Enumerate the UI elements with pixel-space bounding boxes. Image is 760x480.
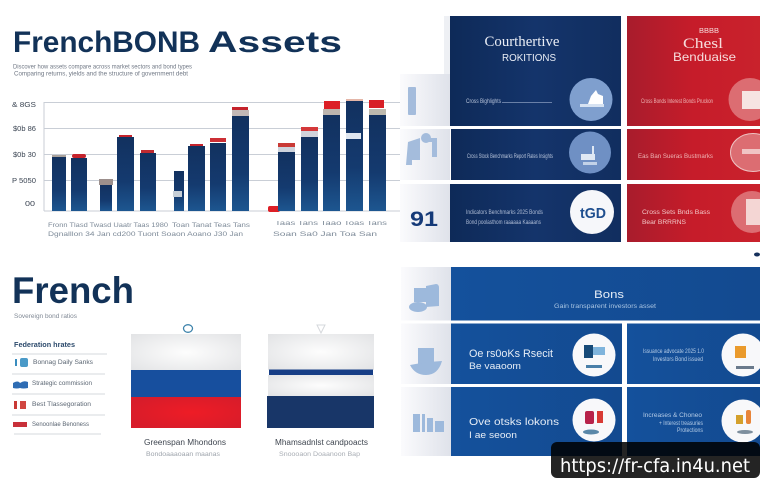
legend item 3: Best Tlassegoration [32,402,91,408]
subtitle text: Comparing returns, yields and the structure of government debt [14,72,188,78]
panel: navy row 3: Bond poolasthom raaaaaa Kaaaans [466,220,541,226]
icon: boat [410,348,442,375]
panel: red row 3: Bear BRRRNS [642,220,686,226]
legend item 2: Strategic commission [32,381,92,387]
y axis labels [12,102,36,208]
panel: flag 1: Bondoaaaoaan maanas [146,452,220,458]
x axis labels: Dgnalllon 34 Jan cd200 Tuont Soaon Aoano J30 Jan [48,232,243,238]
subtitle text: Discover how assets compare across market sectors and bond types [13,64,192,70]
icon: white circle 160 [570,190,614,234]
bars [52,99,386,212]
y axis labels: $0b 30 [13,152,36,159]
panel: navy comparative positions [450,16,621,126]
panel: blue row 3 left: I ae seoon [469,430,517,440]
marker dot [754,252,760,256]
panel: red chest benefits: Chesl [683,36,723,52]
x axis labels: Fronn Tlasd Twasd Uaatr Taas 1980 [48,223,169,229]
panel: navy row 3 [450,184,621,242]
title: French Bond Assets: Assets [208,26,342,59]
watermark url: https://fr-cfa.in4u.net [560,455,750,477]
icon: pink circle document [731,191,760,233]
panel: red chest benefits: Benduaise [673,50,736,64]
icon: white circle with orange block [722,334,760,376]
panel: bonds header: Bons [594,289,625,301]
icon: document bar [408,87,416,115]
panel: bottom right icon strip [401,267,451,456]
subtitle text [13,64,192,78]
y axis labels: P 5050 [12,178,36,185]
icon: number 91: 91 [410,208,438,231]
panel: red chest benefits [627,16,760,126]
heading: ROKITIONS [502,53,556,64]
bar chart [12,99,400,238]
icon: tap [406,133,437,165]
icon: pink oval [730,134,760,172]
heading: French: French [12,270,134,311]
icon: diamond [317,325,325,333]
watermark url [551,442,760,478]
panel: flag 2 [267,325,374,458]
panel: flag 1 [131,325,241,458]
icon: ring [184,325,192,332]
title: French Bond Assets: FrenchBONB [13,26,200,59]
panel: blue row 2 right [627,324,760,384]
y axis labels: $0b 86 [13,126,36,133]
panel: red row 2 [627,129,760,180]
panel: blue row 3 right [627,387,760,456]
panel: navy row 3: Indicators Benchmarks 2025 Bonds [466,210,543,216]
panel: blue row 3 right: Increases & Choneo [643,413,703,419]
panel: red chest benefits: BBBB [699,28,719,35]
legend item 4: Senoonlae Benoness [32,422,89,428]
panel: blue row 2 left: Be vaaoom [469,361,521,371]
icon: pink circle [728,78,760,121]
icon: circle chart [569,132,611,174]
panel: blue row 3 right: + Interest treasuries [659,421,703,427]
subheading: Sovereign bond ratios [14,314,77,320]
panel: bonds header [451,267,760,320]
panel: red chest benefits: Cross Bonds Interest Bonds Pruckon [641,99,713,105]
panel: blue row 2 right: Issuance advocate 2025 1.0 [643,349,705,355]
panel: blue row 2 left [451,324,622,384]
panel: blue row 3 left: Ove otsks lokons [469,417,559,428]
y axis labels: 00 [25,201,35,208]
panel: blue row 3 left [451,387,622,456]
x axis labels [48,221,387,238]
icon: music block [409,284,439,312]
icon: white circle 160: tGD [580,205,606,222]
panel: flag 2: Snoooaon Doaanoon Bap [279,452,361,458]
legend list [12,342,107,434]
icon: city blocks [413,414,444,432]
heading [484,34,560,64]
legend list: Federation hrates [14,342,75,349]
panel: red row 2: Eas Ban Sueras Bustmarks [638,154,713,160]
x axis labels: Toan Tanat Teas Tans [172,223,250,229]
panel: blue row 2 right: Investors Bond issued [653,357,703,363]
panel: flag 1: Greenspan Mhondons [144,438,226,447]
panel: navy row 2 [451,129,621,180]
panel: top right icon strip [400,16,450,242]
icon: white circle with blue squares [572,334,616,376]
y axis labels: & 8GS [12,102,36,109]
x axis labels: Taas Tans Taao Toas Tans [275,221,387,227]
panel: flag 2: Mhamsadnlst candpoacts [275,438,368,447]
icon: white circle with red and orange [572,398,616,442]
x axis labels: Soan Sa0 Jan Toa San [273,232,377,238]
panel: bonds header: Gain transparent investors asset [554,303,656,310]
legend item 1: Bonnag Daily Sanks [33,360,93,366]
title: French Bond Assets [13,26,342,59]
panel: navy row 2: Cross Stock Benchmarks Report Rates Insights [467,154,553,160]
heading: Courthertive [484,34,560,50]
panel: red row 3 [627,184,760,242]
icon: white circle with gold block [722,400,760,442]
panel: blue row 2 left: Oe rs0oKs Rsecit [469,348,553,360]
row text: Cross Bighlights [466,99,501,105]
icon: circle with ridge [570,78,612,121]
panel: red row 3: Cross Sets Bnds Bass [642,210,710,216]
panel: blue row 3 right: Protections [677,428,703,434]
